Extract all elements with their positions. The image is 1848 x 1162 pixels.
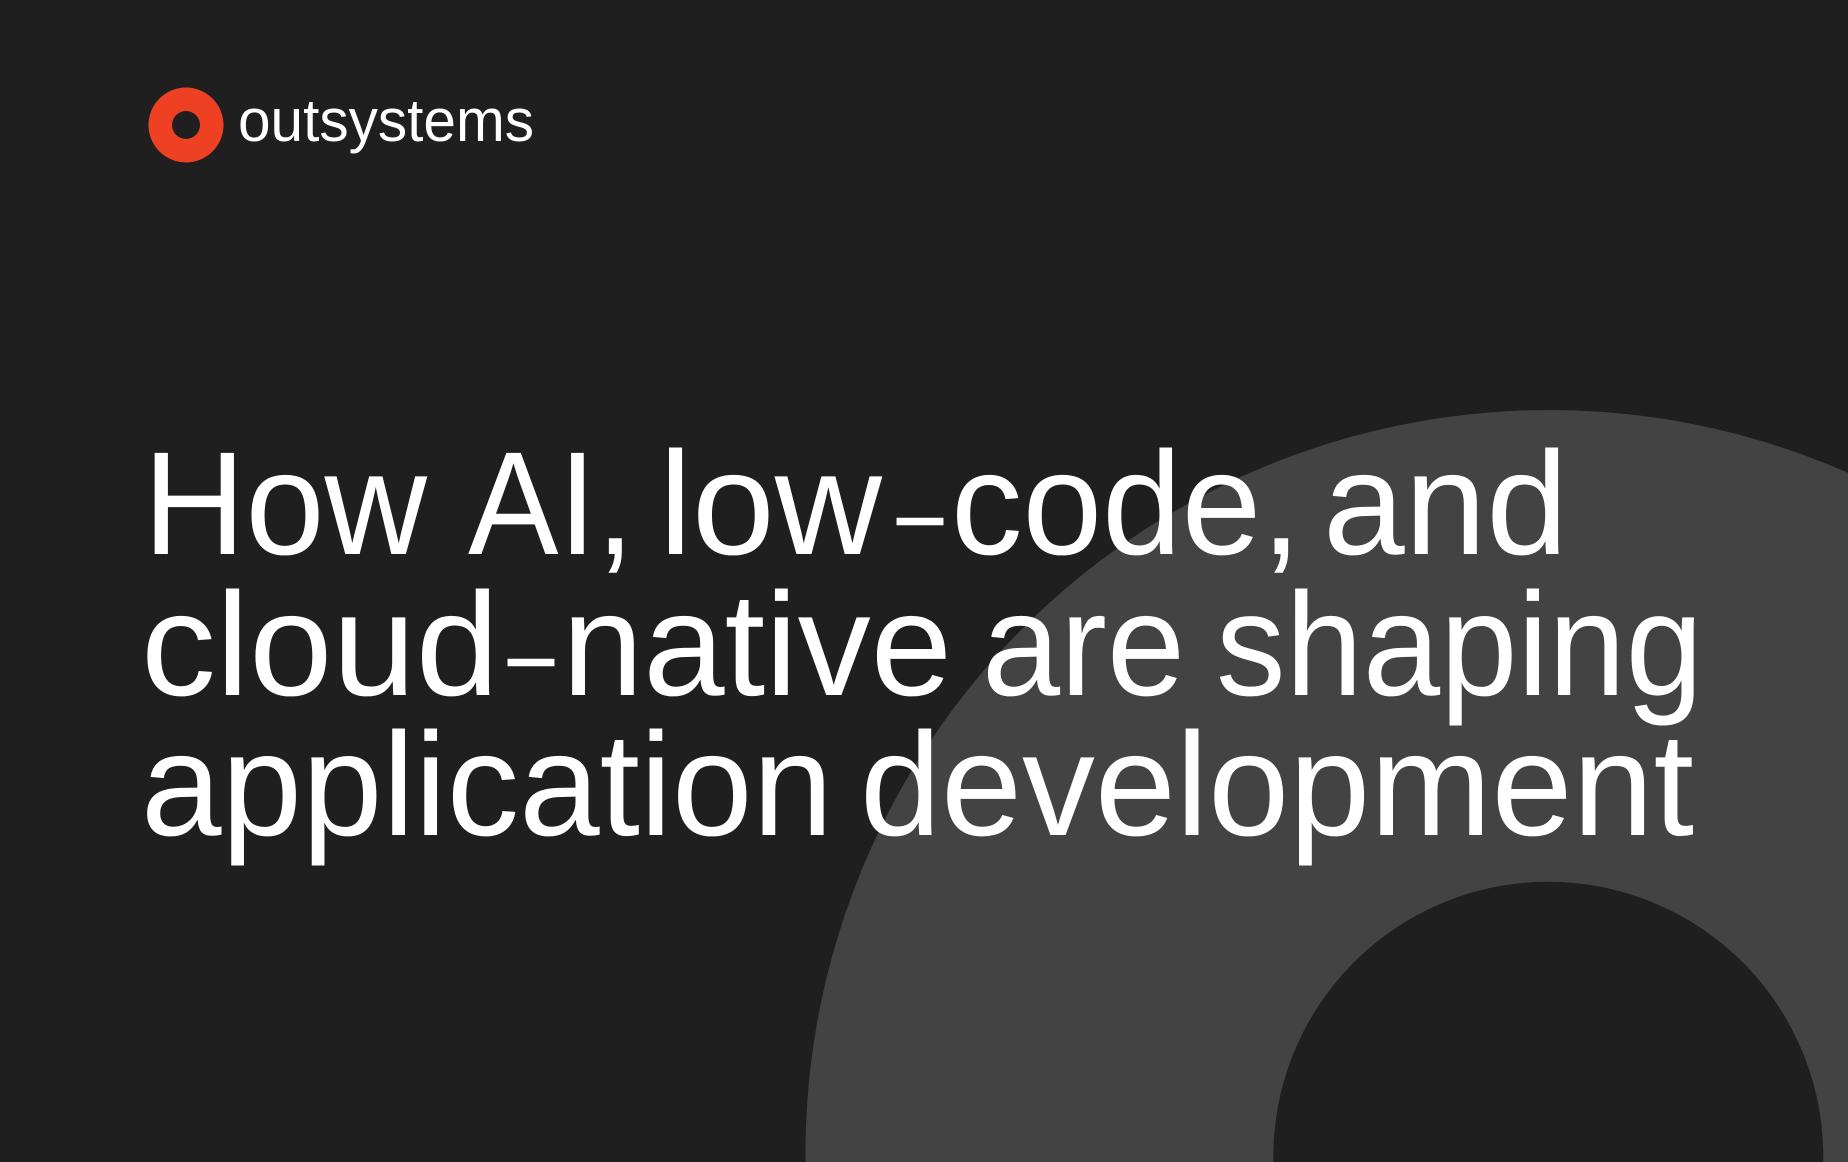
title (141, 422, 1703, 867)
decorative ring background shape (806, 410, 1848, 1162)
title: native (562, 563, 952, 727)
title: application (141, 703, 833, 867)
title: and (1323, 422, 1568, 586)
title: are (982, 563, 1185, 727)
title: cloud (141, 563, 499, 727)
title: development (860, 703, 1694, 867)
title: How (143, 422, 428, 586)
title: code, (951, 422, 1301, 586)
logo wordmark: outsystems (238, 87, 534, 154)
title: - (499, 602, 563, 709)
title: low (659, 422, 883, 586)
title: AI, (468, 422, 634, 586)
icon: outsystems logo mark (148, 88, 224, 162)
title: - (888, 461, 952, 568)
title: shaping (1216, 563, 1703, 727)
